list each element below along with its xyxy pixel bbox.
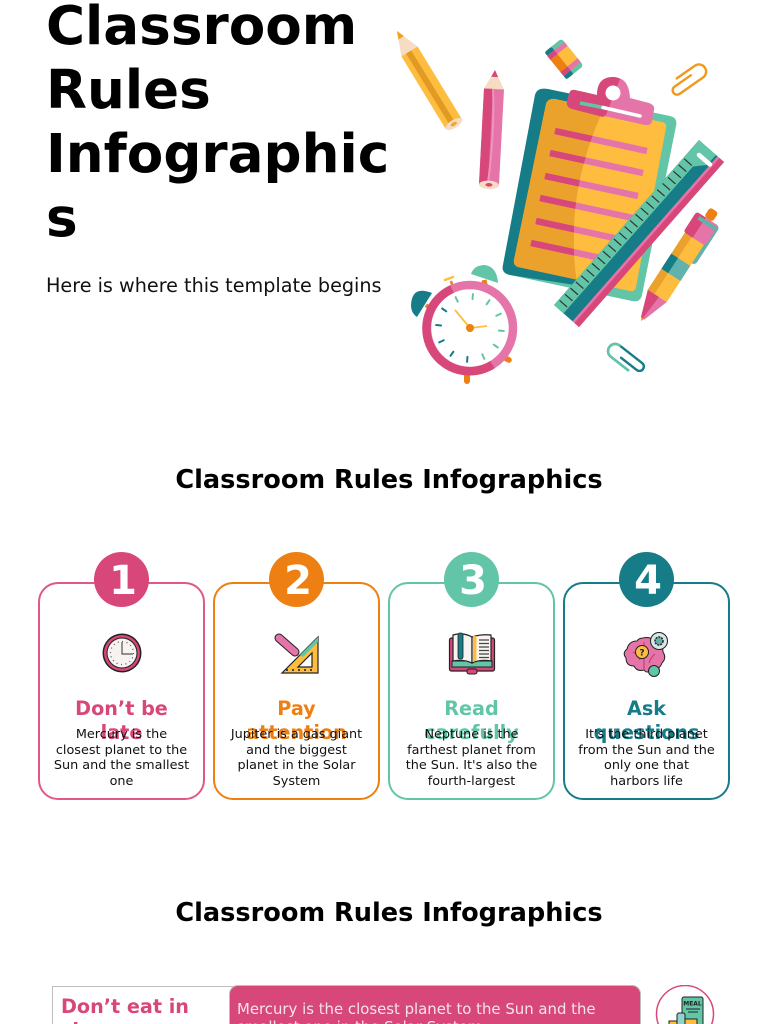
rule 1 text: Mercury is the [76, 727, 167, 742]
paperclip teal [605, 341, 646, 377]
number badge 2 [269, 552, 324, 607]
icon: set square and pencil [274, 634, 319, 674]
rule 4 title: questions [594, 721, 699, 744]
icon: clock [102, 634, 142, 672]
card outline [38, 582, 205, 800]
rule 2 text: System [273, 774, 320, 789]
clipboard [503, 77, 676, 301]
ruler [554, 140, 724, 327]
rule 2 text [230, 727, 362, 789]
rule 3 title [424, 697, 519, 744]
section heading 1: Classroom Rules Infographics [175, 465, 603, 495]
rule 3 title: Read [444, 697, 499, 720]
rule 4 text: only one that [604, 758, 689, 773]
pink pencil [479, 69, 505, 190]
rule 1 text: Sun and the smallest [54, 758, 189, 773]
title: Infographic [46, 123, 389, 185]
rule 4 text [578, 727, 715, 789]
title: s [46, 187, 78, 249]
title [46, 0, 389, 249]
panel: rule 3 [388, 552, 555, 800]
card outline [388, 582, 555, 800]
title: Rules [46, 59, 211, 121]
pen [630, 202, 726, 329]
panel: rule 1 [38, 552, 205, 800]
section heading 2: Classroom Rules Infographics [175, 898, 603, 928]
rule 1 title [75, 697, 168, 744]
rule 1 text: one [110, 774, 133, 789]
icon: meal badge: MEAL [683, 1000, 702, 1008]
clip [567, 77, 654, 125]
subtitle: Here is where this template begins [46, 274, 382, 297]
rule 3 text: fourth-largest [428, 774, 515, 789]
rule 3 text [406, 727, 537, 789]
eraser [544, 38, 584, 80]
number badge 2: 2 [284, 558, 312, 604]
row description [230, 986, 640, 1024]
illustration: school supplies [397, 31, 724, 384]
rule 4 title: Ask [627, 697, 666, 720]
icon: brain with question: ? [639, 648, 645, 658]
row title box [52, 986, 242, 1024]
paper [514, 99, 666, 291]
rule 1 title: Don’t be [75, 697, 168, 720]
paperclip orange [668, 62, 709, 96]
rule 2 text: and the biggest [246, 743, 347, 758]
number badge 4: 4 [634, 558, 662, 604]
rule 4 text: It's the third planet [585, 727, 708, 742]
icon: brain with question [624, 632, 668, 677]
card outline [563, 582, 730, 800]
orange pencil [389, 26, 464, 132]
number badge 3 [444, 552, 499, 607]
rule 2 text: Jupiter is a gas giant [231, 727, 362, 742]
rule 1 text: closest planet to the [56, 743, 187, 758]
rule 3 title: carefully [424, 721, 519, 744]
icon: meal badge [656, 985, 714, 1024]
number badge 4 [619, 552, 674, 607]
rule 2 title: attention [246, 721, 347, 744]
paper lines [531, 131, 647, 263]
number badge 1 [94, 552, 149, 607]
rule 3 text: Neptune is the [424, 727, 519, 742]
card outline [213, 582, 380, 800]
panel: rule 2 [213, 552, 380, 800]
rule 2 title [246, 697, 347, 744]
rule 1 text [54, 727, 189, 789]
rule 4 text: from the Sun and the [578, 743, 715, 758]
alarm clock [411, 265, 513, 381]
rule 1 title: late [101, 721, 142, 744]
row title: Don’t eat in [61, 995, 189, 1018]
rule 2 text: planet in the Solar [237, 758, 356, 773]
rule 4 title [594, 697, 699, 744]
icon: open book [448, 632, 496, 674]
panel: rule 4 [563, 552, 730, 800]
number badge 1: 1 [109, 558, 137, 604]
panel: rule row [52, 985, 714, 1024]
rule 3 text: the Sun. It's also the [406, 758, 537, 773]
rule 3 text: farthest planet from [407, 743, 536, 758]
rule 2 title: Pay [277, 697, 316, 720]
number badge 3: 3 [459, 558, 487, 604]
row description: Mercury is the closest planet to the Sun and the [237, 1000, 596, 1018]
rule 4 text: harbors life [610, 774, 683, 789]
